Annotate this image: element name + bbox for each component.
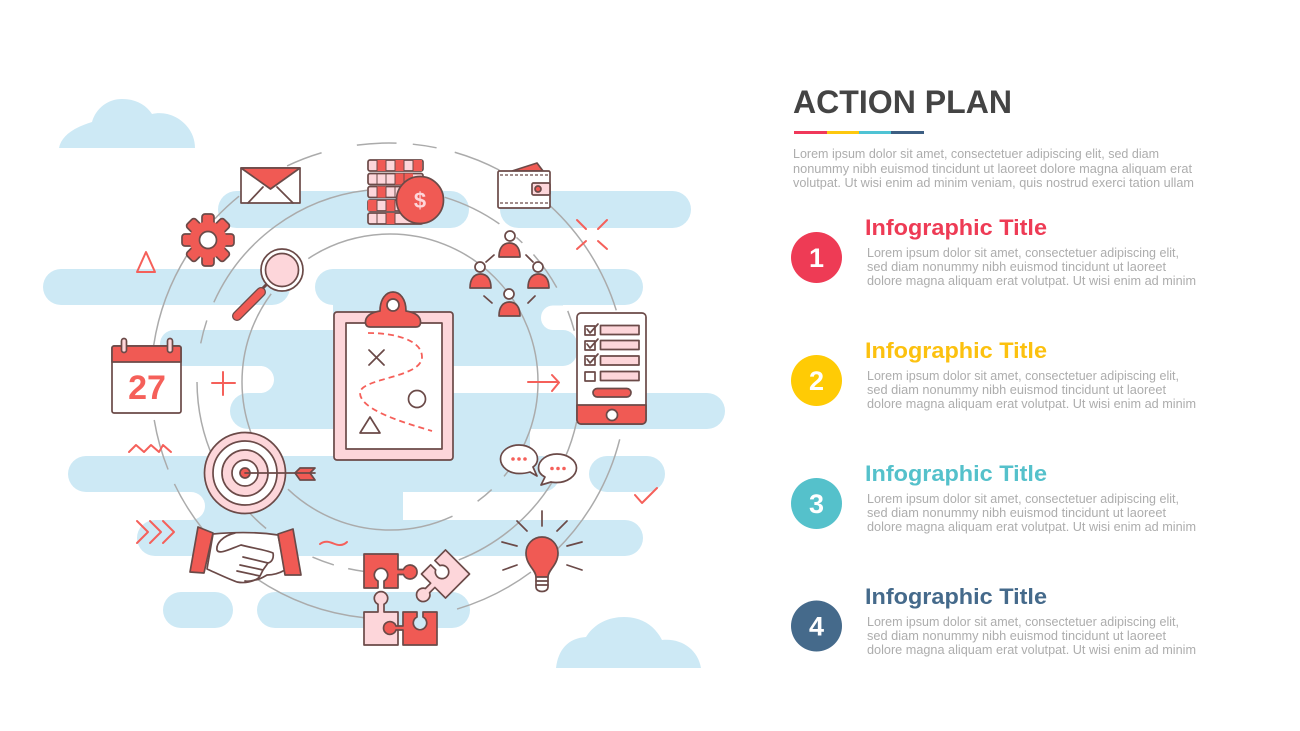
white cut-outs between the bars <box>60 306 703 520</box>
item 1: Infographic Title <box>865 215 1047 240</box>
icon: clipboard plan <box>334 292 453 460</box>
icon: phone checklist <box>577 313 646 424</box>
concentric dashed rings <box>151 143 627 619</box>
item 2: dolore magna aliquam erat volutpat. Ut wisi enim ad minim <box>867 397 1196 411</box>
item 3: sed diam nonummy nibh euismod tincidunt ut laoreet <box>867 506 1167 520</box>
item 1: Lorem ipsum dolor sit amet, consectetuer adipiscing elit, <box>867 246 1179 260</box>
item 3 <box>791 461 1196 534</box>
icon: chat bubbles <box>500 445 576 485</box>
icon: coin stacks with dollar <box>368 160 444 224</box>
item 4: sed diam nonummy nibh euismod tincidunt ut laoreet <box>867 629 1167 643</box>
icon: envelope <box>241 168 300 203</box>
icon: calendar <box>112 338 181 413</box>
icon: handshake <box>190 527 301 583</box>
item 3: Lorem ipsum dolor sit amet, consectetuer adipiscing elit, <box>867 492 1179 506</box>
item 1: 1 <box>809 243 824 273</box>
intro paragraph: nonummy nibh euismod tincidunt ut laoreet dolore magna aliquam erat <box>793 162 1193 176</box>
item 4 <box>791 584 1196 657</box>
item 2: 2 <box>809 366 824 396</box>
title underline colour bar <box>794 131 924 134</box>
title: ACTION PLAN <box>793 84 1012 120</box>
item 1 <box>791 215 1196 288</box>
item 3: 3 <box>809 489 824 519</box>
intro paragraph: Lorem ipsum dolor sit amet, consectetuer adipiscing elit, sed diam <box>793 147 1159 161</box>
icon: wallet <box>498 163 550 208</box>
intro paragraph: volutpat. Ut wisi enim ad minim veniam, quis nostrud exerci tation ullam <box>793 176 1194 190</box>
icon: calendar: 27 <box>128 369 166 407</box>
item 2: Lorem ipsum dolor sit amet, consectetuer adipiscing elit, <box>867 369 1179 383</box>
icon: magnifier <box>237 249 303 316</box>
icon: coin stacks with dollar: $ <box>414 188 426 213</box>
item 2: sed diam nonummy nibh euismod tincidunt ut laoreet <box>867 383 1167 397</box>
item 4: Infographic Title <box>865 584 1047 609</box>
item 1: dolore magna aliquam erat volutpat. Ut wisi enim ad minim <box>867 274 1196 288</box>
icon: light bulb <box>502 511 582 592</box>
intro paragraph <box>793 147 1194 190</box>
item 1: sed diam nonummy nibh euismod tincidunt ut laoreet <box>867 260 1167 274</box>
icon: puzzle pieces <box>364 550 470 645</box>
item 4: 4 <box>809 612 824 642</box>
item 4: Lorem ipsum dolor sit amet, consectetuer adipiscing elit, <box>867 615 1179 629</box>
item 3: dolore magna aliquam erat volutpat. Ut wisi enim ad minim <box>867 520 1196 534</box>
item 3: Infographic Title <box>865 461 1047 486</box>
item 2 <box>791 338 1196 411</box>
item 2: Infographic Title <box>865 338 1047 363</box>
icon: target with arrow <box>204 432 315 514</box>
decorative accents <box>129 220 657 545</box>
icon: gear <box>182 214 234 266</box>
background blue bars and clouds <box>43 99 725 668</box>
item 4: dolore magna aliquam erat volutpat. Ut wisi enim ad minim <box>867 643 1196 657</box>
icon: team network <box>470 231 549 316</box>
